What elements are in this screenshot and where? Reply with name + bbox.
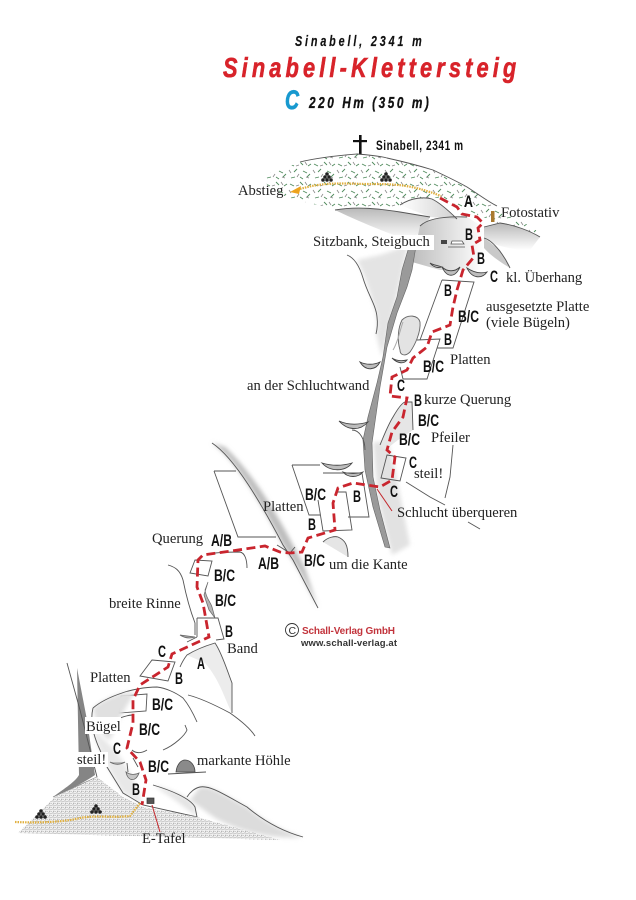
place labels: kurze Querung: [424, 392, 512, 408]
publisher credit: C: [288, 625, 296, 637]
rock lines: middle section: [168, 402, 480, 642]
grade labels: C: [397, 377, 405, 395]
grade labels: B: [414, 392, 422, 410]
scree slope: [18, 777, 280, 840]
grade labels: C: [390, 483, 398, 501]
grade labels: B/C: [458, 308, 479, 326]
place labels: Platten: [90, 670, 131, 686]
grade labels: B/C: [423, 358, 444, 376]
place labels: E-Tafel: [142, 831, 186, 847]
place labels: Platten: [450, 352, 491, 368]
approach path: [15, 803, 140, 822]
grade labels: B/C: [214, 567, 235, 585]
place labels: Schlucht überqueren: [397, 505, 518, 521]
grade labels: C: [409, 454, 417, 472]
publisher credit: Schall-Verlag GmbH: [302, 626, 395, 637]
grade labels: C: [158, 643, 166, 661]
difficulty grade C: C: [285, 85, 300, 115]
place labels: Querung: [152, 531, 204, 547]
grade labels: A: [197, 655, 205, 673]
height and length: 220 Hm (350 m): [308, 93, 429, 111]
grade labels: B: [444, 282, 452, 300]
place labels: an der Schluchtwand: [247, 378, 370, 394]
rock: shading below summit: [335, 198, 540, 270]
grade labels: B/C: [215, 592, 236, 610]
grade labels: B/C: [418, 412, 439, 430]
grade labels: A/B: [211, 532, 232, 550]
grade labels: B: [132, 781, 140, 799]
grade labels: B/C: [148, 758, 169, 776]
grade labels: B: [353, 488, 361, 506]
place labels: Pfeiler: [431, 430, 470, 446]
pointer: E-Tafel: [152, 805, 160, 832]
grade labels: B/C: [304, 552, 325, 570]
route: red dashed climbing line: [127, 198, 483, 805]
grade labels: B: [444, 331, 452, 349]
pointer: Schlucht überqueren: [377, 489, 392, 511]
descent path: [290, 184, 441, 196]
grade labels: [113, 193, 498, 799]
rock: central gully wall: [347, 226, 420, 555]
grade labels: C: [113, 740, 121, 758]
publisher credit: www.schall-verlag.at: [300, 638, 398, 649]
place labels: ausgesetzte Platte: [486, 299, 589, 315]
grade labels: B: [477, 250, 485, 268]
icon: Fotostativ post: [491, 211, 494, 222]
grade labels: B: [465, 226, 473, 244]
icon: lower cairn right: [90, 804, 102, 814]
rock: lower section: [53, 643, 303, 838]
grade labels: A: [464, 193, 473, 211]
place labels: steil!: [414, 466, 443, 482]
grade labels: B: [175, 670, 183, 688]
grade labels: B/C: [152, 696, 173, 714]
place labels: (viele Bügeln): [486, 315, 570, 331]
icon: Sitzbank and Steigbuch: [441, 240, 465, 247]
place labels: [77, 183, 589, 847]
rock: west ridge: [212, 443, 348, 608]
place labels: Sitzbank, Steigbuch: [313, 234, 430, 250]
title: Sinabell-Klettersteig: Sinabell-Klettersteig: [223, 52, 516, 84]
grade labels: A/B: [258, 555, 279, 573]
grade labels: B/C: [139, 721, 160, 739]
grade labels: B/C: [399, 431, 420, 449]
place labels: Fotostativ: [501, 205, 560, 221]
place labels: Abstieg: [238, 183, 284, 199]
icon: lower cairn left: [35, 809, 47, 819]
label: summit: Sinabell, 2341 m: [376, 137, 463, 153]
summit vegetation area: [263, 154, 540, 234]
icon: summit cross: [353, 135, 367, 154]
icon: markante Höhle cave: [168, 760, 206, 774]
grade labels: B/C: [305, 486, 326, 504]
climbing slabs: [119, 280, 474, 713]
overhang arcs: [322, 263, 487, 476]
place labels: markante Höhle: [197, 753, 291, 769]
place labels: Platten: [263, 499, 304, 515]
place labels: breite Rinne: [109, 596, 181, 612]
publisher credit: [286, 624, 398, 649]
grade labels: B: [308, 516, 316, 534]
icon: upper cairn right: [380, 172, 392, 182]
place labels: Band: [227, 641, 259, 657]
icon: upper cairn left: [321, 172, 333, 182]
place labels: kl. Überhang: [506, 269, 583, 286]
place labels: steil!: [77, 752, 106, 768]
place labels: um die Kante: [329, 557, 408, 573]
grade labels: B: [225, 623, 233, 641]
icon: E-Tafel sign: [147, 798, 154, 804]
label white backings: [77, 235, 434, 767]
place labels: Bügel: [86, 719, 121, 735]
grade labels: C: [490, 268, 498, 286]
title: summit name and altitude: Sinabell, 2341 m: [295, 32, 422, 49]
